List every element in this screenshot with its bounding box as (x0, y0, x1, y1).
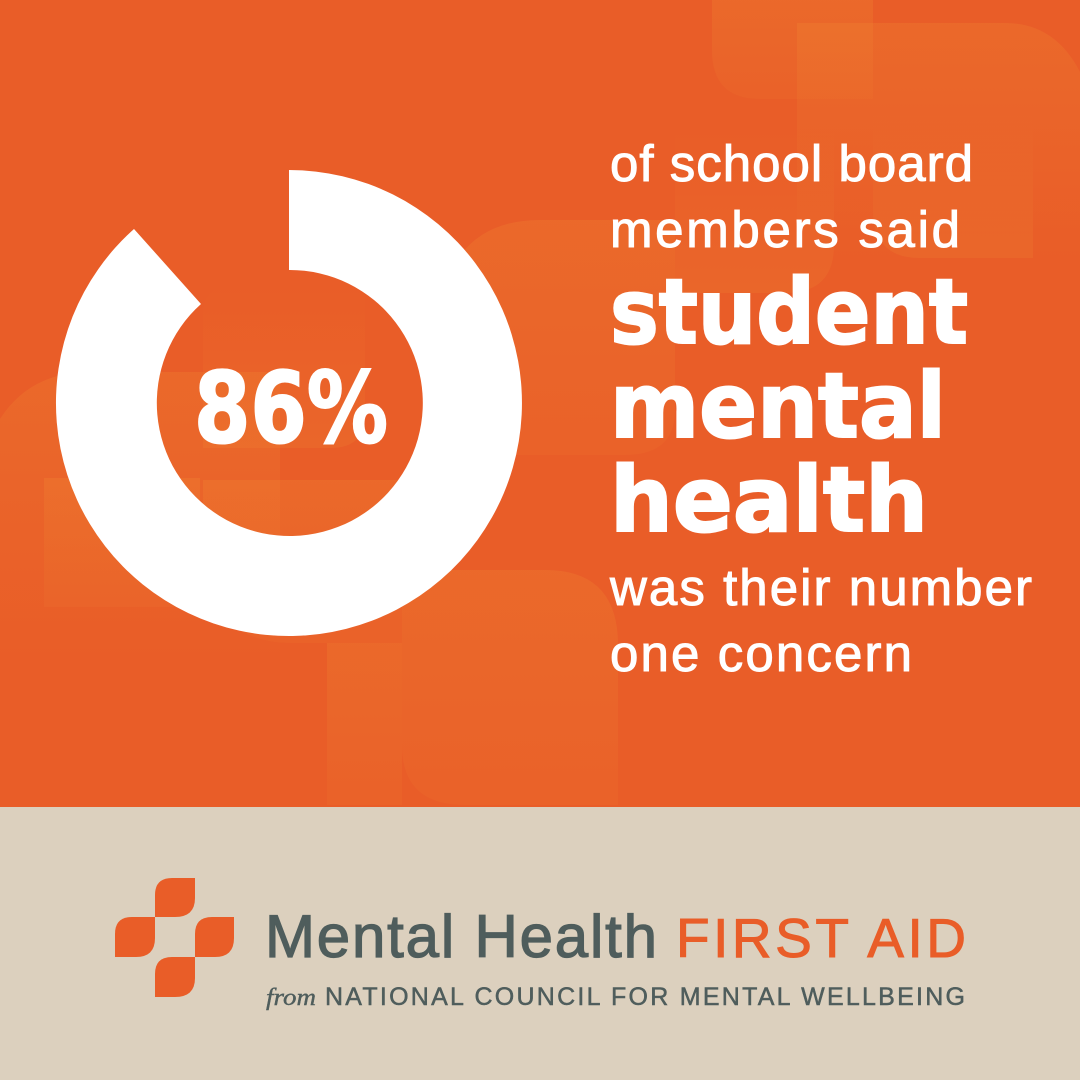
logo wordmark: FIRST AID: FIRST AID (676, 907, 966, 969)
line: one concern: one concern (610, 625, 912, 682)
line: of school board: of school board (610, 135, 973, 192)
logo wordmark: Mental Health: Mental Health (265, 903, 657, 970)
emphasis: student: student (610, 260, 968, 365)
panel: beige footer (0, 807, 1080, 1080)
icon: Mental Health First Aid cross logo (115, 878, 234, 997)
text block: statement (609, 135, 1032, 682)
line: was their number: was their number (609, 559, 1032, 616)
logo tagline: National Council for Mental Wellbeing: NATIONAL COUNCIL FOR MENTAL WELLBEING (325, 983, 965, 1011)
background pattern of rounded shapes (0, 0, 1080, 805)
emphasis: mental: mental (610, 354, 946, 459)
emphasis: health: health (610, 448, 928, 553)
donut value: 86%: 86% (194, 352, 388, 466)
panel: orange background (0, 0, 1080, 807)
donut chart: 86 percent (56, 170, 522, 636)
logo tagline: from: from (266, 985, 316, 1011)
line: members said: members said (610, 201, 960, 258)
